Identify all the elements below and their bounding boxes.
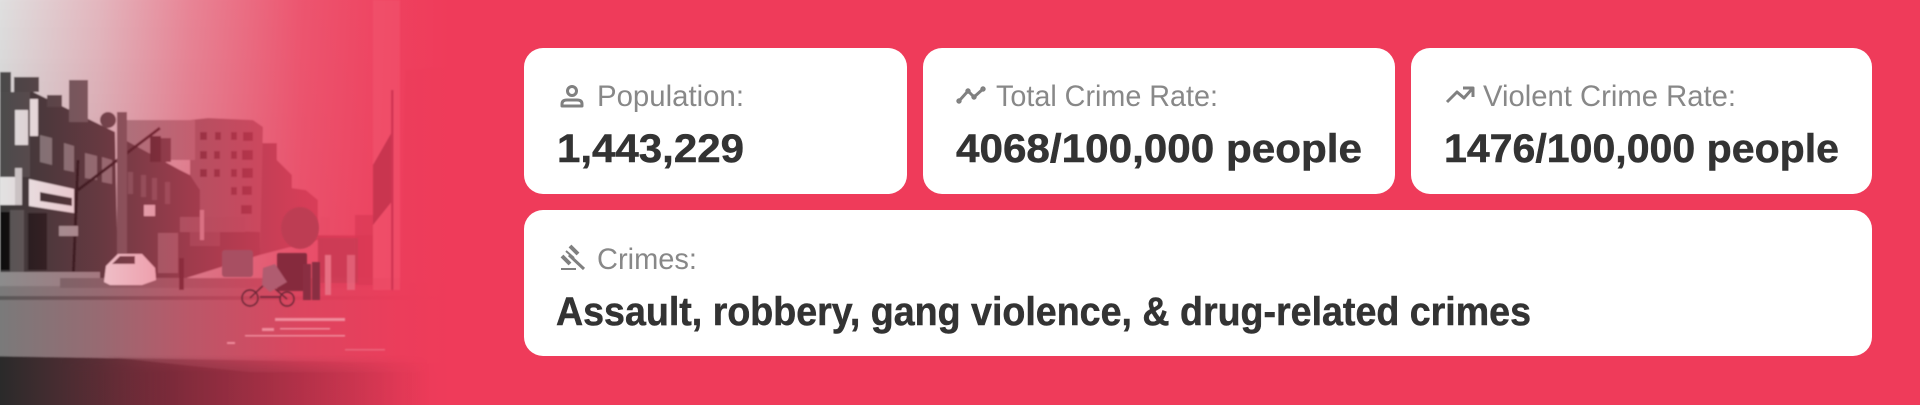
road xyxy=(0,283,480,363)
tinted street details xyxy=(222,0,400,350)
wall and flag xyxy=(373,0,400,290)
label: population: Population: xyxy=(597,80,744,113)
icon: person xyxy=(562,86,582,106)
crosswalk xyxy=(227,318,385,350)
red fade overlay xyxy=(0,0,500,405)
label: crimes: Crimes: xyxy=(597,243,697,276)
upper windows xyxy=(40,135,112,184)
shop row xyxy=(125,140,260,280)
value: crimes: Assault, robbery, gang violence, & drug-related crimes xyxy=(556,290,1531,334)
value: violent crime rate: 1476/100,000 people xyxy=(1444,127,1839,171)
card: crimes xyxy=(524,210,1872,356)
street photo with red gradient xyxy=(0,0,416,405)
mid-rise building xyxy=(190,118,263,255)
pedestrians xyxy=(303,262,320,300)
value: total crime rate: 4068/100,000 people xyxy=(956,127,1362,171)
street trees xyxy=(281,207,319,249)
white car xyxy=(104,254,156,285)
card: violent crime rate xyxy=(1411,48,1872,194)
value: population: 1,443,229 xyxy=(557,127,744,171)
label: violent crime rate: Violent Crime Rate: xyxy=(1483,80,1736,113)
card: total crime rate xyxy=(923,48,1395,194)
icon: gavel xyxy=(561,246,584,269)
label: total crime rate: Total Crime Rate: xyxy=(996,80,1218,113)
corner building xyxy=(0,92,118,280)
traffic light pole xyxy=(73,128,160,283)
shop signs xyxy=(15,110,28,145)
cyclist xyxy=(242,282,294,306)
foreground shadow on lower road xyxy=(144,359,402,405)
far car and van xyxy=(222,250,253,277)
receding buildings xyxy=(260,143,318,255)
card: population xyxy=(524,48,907,194)
background low building xyxy=(125,120,195,160)
right side wall xyxy=(400,65,480,300)
icon: trending up arrow xyxy=(1447,88,1473,102)
pedestrian xyxy=(179,258,184,290)
icon: line chart xyxy=(958,88,984,102)
